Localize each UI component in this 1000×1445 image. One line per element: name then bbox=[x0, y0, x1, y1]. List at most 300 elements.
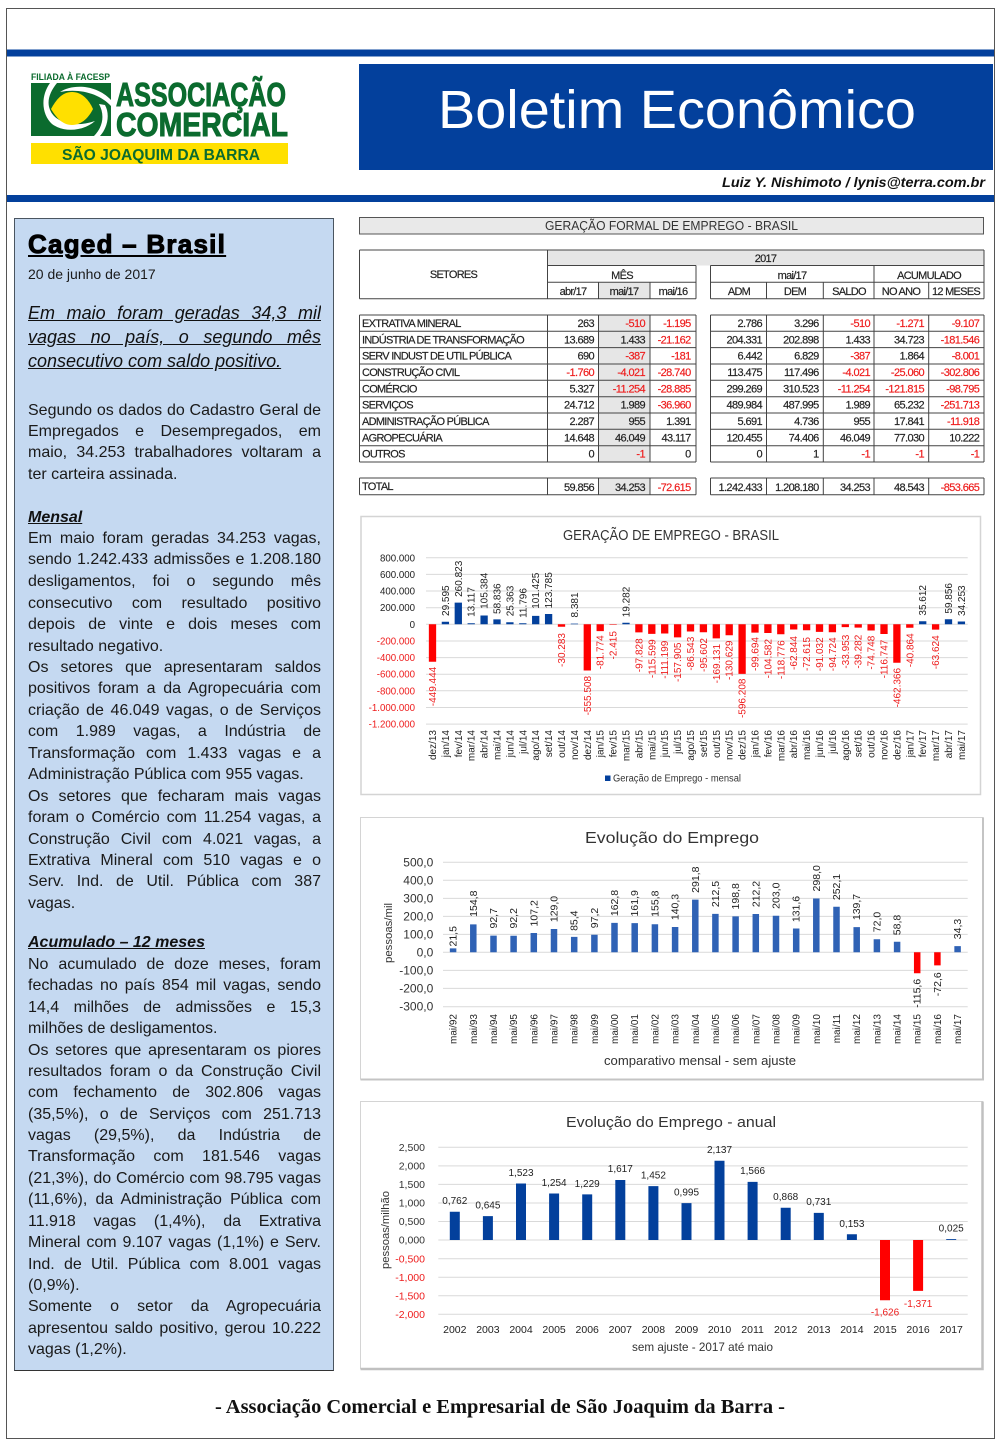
data labels: 155,8 bbox=[649, 890, 661, 917]
x axis labels: 2002 bbox=[443, 1324, 467, 1336]
section body: Acumulado: 11.918 vagas (1,4%), da Extrativa bbox=[28, 1213, 321, 1230]
table row: Administração Pública: -11.918 bbox=[947, 416, 980, 428]
y axis labels: -100,0 bbox=[399, 963, 434, 977]
x axis labels: mai/15 bbox=[913, 1014, 924, 1044]
lead text: vagas no país, o segundo mês bbox=[28, 327, 321, 347]
section body: Mensal: foram o Comércio com 11.254 vagas, a bbox=[28, 809, 321, 826]
x axis labels: ago/14 bbox=[531, 730, 542, 761]
table row: Administração Pública: 4.736 bbox=[794, 416, 819, 428]
x axis labels: 2011 bbox=[741, 1324, 764, 1336]
data labels: -111.199 bbox=[660, 640, 671, 679]
table header labels: MÊS bbox=[611, 269, 633, 282]
table row: Outros: 1 bbox=[813, 449, 819, 461]
y axis labels: -200.000 bbox=[377, 636, 416, 648]
section body: Acumulado: resultados foram o da Construção Civil bbox=[28, 1063, 321, 1080]
x axis labels: 2005 bbox=[542, 1324, 566, 1336]
data labels: -115,6 bbox=[912, 979, 924, 1008]
table row: Serv Indust de Util Pública: 690 bbox=[577, 351, 594, 363]
table row: Construção Civil: -1.760 bbox=[566, 367, 594, 379]
data labels: 34,3 bbox=[952, 919, 964, 939]
table row: Serv Indust de Util Pública: -181 bbox=[671, 351, 691, 363]
data labels: 129,0 bbox=[548, 896, 560, 922]
x axis labels: mai/92 bbox=[449, 1014, 460, 1044]
x axis labels: nov/16 bbox=[880, 730, 890, 760]
data labels bbox=[442, 1145, 964, 1318]
y axis labels bbox=[395, 1142, 425, 1321]
table row: Agropecuária: 46.049 bbox=[615, 432, 645, 444]
table header labels: DEM bbox=[784, 286, 807, 298]
table row: Agropecuária: 14.648 bbox=[564, 432, 594, 444]
table row: Serv Indust de Util Pública: -8.001 bbox=[952, 351, 980, 363]
table row: Serv Indust de Util Pública bbox=[362, 350, 980, 363]
x axis labels: abr/15 bbox=[634, 730, 645, 758]
data labels: 1,229 bbox=[575, 1179, 600, 1190]
x axis labels: mai/94 bbox=[489, 1014, 500, 1044]
table row: Agropecuária: AGROPECUÁRIA bbox=[362, 431, 443, 444]
table row: Serviços: 24.712 bbox=[564, 400, 594, 412]
table row: Construção Civil: CONSTRUÇÃO CIVIL bbox=[362, 366, 460, 379]
section body: Mensal: Os setores que apresentaram saldos bbox=[28, 659, 321, 676]
x axis labels: mai/02 bbox=[650, 1014, 661, 1044]
table row: Construção Civil: 117.496 bbox=[784, 367, 819, 379]
x axis labels: set/14 bbox=[544, 730, 555, 757]
lead text bbox=[28, 303, 321, 371]
x axis labels: fev/15 bbox=[609, 730, 620, 757]
x axis labels: mai/06 bbox=[731, 1014, 742, 1044]
y axis labels: 400,0 bbox=[403, 873, 434, 887]
table row: Comércio: 310.523 bbox=[783, 383, 819, 395]
x axis labels: mai/08 bbox=[772, 1014, 782, 1044]
table row: Construção Civil bbox=[362, 366, 980, 379]
table row: Extrativa Mineral: -510 bbox=[850, 318, 870, 330]
y axis labels: 1,500 bbox=[399, 1179, 425, 1191]
data labels: 2,137 bbox=[707, 1145, 732, 1156]
data labels: 131,6 bbox=[791, 896, 803, 922]
data labels: 203,0 bbox=[770, 882, 782, 909]
x axis labels: 2006 bbox=[576, 1324, 599, 1336]
intro paragraph: maio, 34.253 trabalhadores voltaram a bbox=[28, 444, 321, 461]
x axis labels: 2015 bbox=[873, 1324, 897, 1336]
data labels: 0,153 bbox=[839, 1219, 865, 1230]
table row: Agropecuária: 43.117 bbox=[661, 432, 691, 444]
table row: Serviços: 1.989 bbox=[845, 400, 870, 412]
section body: Mensal: consecutivo com resultado positivo bbox=[28, 595, 321, 612]
table header labels: ADM bbox=[728, 286, 751, 298]
section body: Mensal: positivos foram a da Agropecuária com bbox=[28, 680, 321, 697]
data labels: 0,995 bbox=[674, 1188, 699, 1198]
x axis labels: out/14 bbox=[557, 730, 568, 758]
y axis labels: -2,000 bbox=[395, 1309, 425, 1321]
x axis labels: fev/16 bbox=[763, 730, 774, 757]
x axis labels: mai/95 bbox=[509, 1014, 520, 1044]
table row: Extrativa Mineral: 263 bbox=[577, 318, 594, 330]
table header labels bbox=[430, 253, 980, 298]
section body: Acumulado: Transformação com 181.546 vagas bbox=[28, 1148, 321, 1165]
data labels: 1,523 bbox=[508, 1168, 534, 1179]
section body: Acumulado: vagas (1,2%). bbox=[28, 1341, 127, 1358]
footer: - Associação Comercial e Empresarial de São Joaquim da Barra - bbox=[215, 1396, 785, 1418]
x axis labels: mai/97 bbox=[550, 1014, 560, 1044]
data labels: 154,8 bbox=[468, 890, 480, 917]
table row: Total bbox=[362, 481, 980, 494]
x axis labels: dez/13 bbox=[428, 730, 439, 760]
section body: Acumulado: Mineral com 9.107 vagas (1,1%) e Serv. bbox=[28, 1234, 321, 1251]
table row: Construção Civil: 113.475 bbox=[727, 367, 762, 379]
x axis labels: nov/15 bbox=[725, 730, 736, 760]
table shading bbox=[548, 250, 984, 495]
data labels: 72,0 bbox=[871, 912, 883, 932]
employment table title bar: GERAÇÃO FORMAL DE EMPREGO - BRASIL bbox=[545, 219, 798, 233]
data labels: -95.602 bbox=[699, 638, 710, 672]
x axis labels: abr/17 bbox=[944, 730, 955, 758]
table row: Comércio: 299.269 bbox=[726, 383, 762, 395]
x axis labels: mar/15 bbox=[622, 730, 632, 761]
y axis labels: 100,0 bbox=[403, 927, 434, 941]
table row: Extrativa Mineral: -510 bbox=[625, 318, 645, 330]
table row: Indústria de Transformação: 34.723 bbox=[894, 334, 924, 346]
data labels: 59.856 bbox=[944, 583, 955, 614]
data labels: -91.032 bbox=[815, 637, 826, 671]
chart caption: sem ajuste - 2017 até maio bbox=[632, 1340, 773, 1354]
y axis labels: 500,0 bbox=[403, 855, 434, 869]
y axis labels: -300,0 bbox=[399, 1000, 434, 1014]
section body: Acumulado: milhões de desligamentos. bbox=[28, 1020, 217, 1037]
y axis labels: -1,000 bbox=[395, 1272, 425, 1284]
x axis labels: ago/15 bbox=[686, 730, 697, 761]
section body: Mensal: Transformação com 1.433 vagas e a bbox=[28, 745, 321, 762]
y axis labels bbox=[399, 855, 434, 1014]
data labels: 161,9 bbox=[629, 890, 641, 916]
x axis labels: jan/15 bbox=[596, 730, 607, 758]
y axis labels: 600.000 bbox=[380, 570, 416, 581]
x axis labels: jun/15 bbox=[660, 730, 671, 758]
x axis labels: jul/16 bbox=[828, 730, 839, 755]
x axis labels: 2016 bbox=[906, 1324, 930, 1336]
chart caption: comparativo mensal - sem ajuste bbox=[604, 1054, 796, 1068]
x axis labels bbox=[428, 730, 968, 761]
data labels: 260.823 bbox=[454, 560, 465, 597]
x axis labels: 2017 bbox=[940, 1324, 963, 1336]
data labels: 1,452 bbox=[641, 1170, 666, 1182]
section body: Acumulado bbox=[28, 956, 321, 1358]
data labels: 105.384 bbox=[480, 572, 491, 609]
data labels: -449.444 bbox=[428, 666, 439, 706]
y axis labels: 400.000 bbox=[380, 586, 416, 598]
data labels: -1,371 bbox=[904, 1299, 933, 1310]
table row: Serviços: 489.984 bbox=[726, 400, 762, 412]
y axis labels: -800.000 bbox=[377, 686, 416, 697]
section body: Mensal: criação de 46.049 vagas, o de Serviços bbox=[28, 702, 321, 719]
data labels: 0,645 bbox=[475, 1200, 501, 1212]
data labels: -62.844 bbox=[789, 636, 800, 670]
data labels: 58,8 bbox=[892, 915, 904, 935]
data labels: -39.282 bbox=[854, 634, 865, 669]
section body: Mensal: vagas. bbox=[28, 895, 75, 912]
table row: Serviços: 487.995 bbox=[783, 400, 819, 412]
table row: Serviços: -36.960 bbox=[658, 400, 691, 412]
section body: Acumulado: Ind. de Util. Pública com 8.001 vagas bbox=[28, 1256, 321, 1273]
table row: Construção Civil: -302.806 bbox=[941, 367, 980, 379]
table row: Outros: 0 bbox=[588, 449, 594, 461]
table row: Extrativa Mineral: -1.271 bbox=[896, 318, 924, 330]
y axis labels: -0,500 bbox=[395, 1253, 425, 1265]
table row: Total: TOTAL bbox=[362, 481, 393, 493]
x axis labels: mai/93 bbox=[469, 1014, 480, 1044]
logo: Associação Comercial: FILIADA À FACESP bbox=[31, 72, 111, 83]
section body: Acumulado: apresentou saldo positivo, gerou 10.222 bbox=[28, 1320, 321, 1337]
y axis title: pessoas/mil bbox=[383, 903, 395, 963]
y axis labels: -1.000.000 bbox=[369, 703, 416, 714]
y axis labels: -600.000 bbox=[377, 670, 416, 681]
x axis labels: mai/05 bbox=[711, 1014, 722, 1044]
table row: Outros: -1 bbox=[915, 449, 924, 461]
section: Mensal bbox=[28, 509, 321, 912]
x axis labels: mai/11 bbox=[832, 1014, 843, 1043]
logo: Associação Comercial: COMERCIAL bbox=[116, 106, 288, 143]
data labels bbox=[448, 865, 964, 1008]
table row: Comércio: -98.795 bbox=[946, 383, 980, 395]
y axis labels: 1,000 bbox=[399, 1198, 425, 1210]
intro paragraph: Empregados e Desempregados, em bbox=[28, 423, 321, 440]
table row: Extrativa Mineral: 3.296 bbox=[794, 318, 819, 330]
table row: Extrativa Mineral: -1.195 bbox=[663, 318, 691, 330]
data labels: -555.508 bbox=[583, 676, 594, 715]
x axis labels: mai/07 bbox=[751, 1014, 762, 1044]
table row: Construção Civil: -25.060 bbox=[891, 367, 924, 379]
positive bars bbox=[450, 1161, 956, 1240]
table row: Agropecuária: 120.455 bbox=[726, 432, 762, 444]
x axis labels: mai/00 bbox=[610, 1014, 621, 1044]
section body: Acumulado: (21,3%), do Comércio com 98.795 vagas bbox=[28, 1170, 321, 1187]
data labels: -116.747 bbox=[880, 639, 890, 678]
data labels: 162,8 bbox=[609, 890, 621, 916]
table header labels: ACUMULADO bbox=[897, 270, 962, 282]
table row: Serv Indust de Util Pública: 1.864 bbox=[899, 351, 924, 363]
table row: Administração Pública bbox=[362, 415, 980, 428]
table row: Total: 1.208.180 bbox=[775, 482, 819, 494]
x axis labels: mai/04 bbox=[691, 1014, 702, 1044]
table row: Outros: 0 bbox=[685, 449, 691, 461]
table row: Outros bbox=[362, 449, 980, 461]
data labels: 34.253 bbox=[957, 585, 968, 616]
data labels: -94.724 bbox=[828, 637, 839, 671]
section body: Acumulado: No acumulado de doze meses, foram bbox=[28, 956, 321, 973]
panel: Caged - Brasil background bbox=[14, 218, 334, 1371]
table row: Comércio: COMÉRCIO bbox=[362, 382, 418, 395]
data labels: -104.582 bbox=[763, 639, 774, 678]
table row: Serv Indust de Util Pública: -387 bbox=[850, 351, 870, 363]
legend: Geração de Emprego - mensal bbox=[613, 774, 741, 784]
table row: Outros: -1 bbox=[636, 449, 645, 461]
intro paragraph: Segundo os dados do Cadastro Geral de bbox=[28, 402, 321, 419]
y axis labels: 0,500 bbox=[399, 1216, 425, 1228]
y axis labels: 0,000 bbox=[399, 1235, 425, 1247]
table row: Outros: -1 bbox=[861, 449, 870, 461]
table row: Comércio: -11.254 bbox=[613, 383, 645, 395]
section body: Acumulado: (0,9%). bbox=[28, 1277, 80, 1294]
data labels: 11.796 bbox=[518, 588, 529, 618]
x axis labels: 2007 bbox=[609, 1324, 632, 1336]
data labels: 1,254 bbox=[542, 1178, 567, 1189]
x axis labels: mai/17 bbox=[957, 730, 968, 760]
section body: Mensal: Construção Civil com 4.021 vagas, a bbox=[28, 831, 321, 848]
x axis labels: 2004 bbox=[509, 1324, 533, 1336]
data labels: -596.208 bbox=[738, 678, 749, 718]
negative bars bbox=[880, 1240, 923, 1300]
table header labels: SALDO bbox=[832, 286, 867, 298]
table row: Indústria de Transformação: -21.162 bbox=[658, 334, 691, 346]
x axis labels: out/16 bbox=[867, 730, 878, 758]
lead text: Em maio foram geradas 34,3 mil bbox=[28, 303, 321, 323]
bottom header rule bbox=[7, 195, 994, 202]
data labels: -462.366 bbox=[892, 668, 903, 707]
section body: Mensal: Extrativa Mineral com 510 vagas e o bbox=[28, 852, 321, 869]
x axis labels bbox=[443, 1324, 963, 1336]
x axis labels: abr/16 bbox=[789, 730, 800, 758]
data labels: -97.828 bbox=[634, 638, 645, 672]
data labels: 101.425 bbox=[531, 572, 542, 609]
x axis labels: mai/10 bbox=[812, 1014, 823, 1044]
table row: Outros: OUTROS bbox=[362, 449, 405, 461]
section body: Acumulado: fechadas no país 854 mil vagas, sendo bbox=[28, 977, 321, 994]
table row: Total: -72.615 bbox=[658, 482, 691, 494]
data labels: -81.774 bbox=[596, 635, 607, 669]
data labels: -1,626 bbox=[871, 1308, 900, 1318]
data labels: 0,868 bbox=[773, 1192, 799, 1203]
title banner: Boletim Econômico bbox=[359, 64, 993, 170]
section body: Mensal: Em maio foram geradas 34.253 vagas, bbox=[28, 530, 321, 547]
table row: Total: 34.253 bbox=[615, 482, 645, 494]
data labels: -30.283 bbox=[557, 633, 568, 667]
table row: Outros: -1 bbox=[971, 449, 980, 461]
table row: Serv Indust de Util Pública: -387 bbox=[625, 351, 645, 363]
data labels: -157.905 bbox=[673, 642, 684, 682]
table row: Total: 59.856 bbox=[564, 482, 594, 494]
section: Acumulado - 12 meses bbox=[28, 934, 321, 1358]
data labels: 1,566 bbox=[740, 1166, 766, 1177]
data labels bbox=[428, 560, 968, 718]
table row: Comércio: -11.254 bbox=[838, 383, 870, 395]
data labels: 198,8 bbox=[730, 883, 742, 909]
x axis labels: mai/17 bbox=[953, 1014, 964, 1044]
table row: Extrativa Mineral: EXTRATIVA MINERAL bbox=[362, 318, 461, 330]
y axis labels: 200,0 bbox=[403, 909, 434, 923]
x axis labels: mar/17 bbox=[931, 730, 942, 761]
data labels: -74.748 bbox=[867, 635, 878, 670]
table row: Construção Civil: -4.021 bbox=[617, 367, 645, 379]
table row: Agropecuária: 46.049 bbox=[840, 432, 870, 444]
x axis labels: 2013 bbox=[807, 1324, 831, 1336]
data labels: -33.953 bbox=[841, 634, 852, 669]
table row: Serviços bbox=[362, 400, 980, 412]
table header labels: mai/17 bbox=[610, 286, 639, 298]
table row: Administração Pública: 955 bbox=[853, 416, 870, 428]
table row: Comércio: -121.815 bbox=[885, 383, 924, 395]
x axis labels: 2009 bbox=[675, 1324, 698, 1336]
data labels: 291,8 bbox=[690, 866, 702, 893]
table row: Extrativa Mineral: 2.786 bbox=[737, 318, 762, 330]
x axis labels: fev/14 bbox=[454, 730, 465, 757]
y axis labels: -1,500 bbox=[395, 1290, 425, 1302]
chart: Evolução do Emprego bbox=[360, 818, 983, 1080]
table row: Comércio: -28.885 bbox=[658, 383, 691, 395]
x axis labels: 2012 bbox=[774, 1324, 798, 1336]
positive bars bbox=[450, 898, 961, 952]
table row: Extrativa Mineral bbox=[362, 318, 980, 330]
x axis labels: mai/99 bbox=[590, 1014, 601, 1044]
table row: Serv Indust de Util Pública: SERV INDUST DE UTIL PÚBLICA bbox=[362, 350, 512, 363]
x axis labels: mai/12 bbox=[852, 1014, 863, 1044]
section heading: Acumulado: Acumulado – 12 meses bbox=[28, 934, 205, 951]
table row: Total: 1.242.433 bbox=[718, 482, 762, 494]
x axis labels: fev/17 bbox=[918, 730, 929, 757]
logo: Associação Comercial: SÃO JOAQUIM DA BARRA bbox=[62, 144, 260, 164]
data labels: 123.785 bbox=[544, 572, 555, 608]
table row: Administração Pública: 2.287 bbox=[569, 416, 594, 428]
chart: Geração de Emprego - Brasil bbox=[361, 516, 980, 794]
data labels: 212,2 bbox=[750, 881, 762, 907]
negative bars bbox=[429, 624, 939, 674]
data labels: 97,2 bbox=[589, 908, 601, 928]
data labels: 140,3 bbox=[670, 894, 682, 920]
data labels: 35.612 bbox=[918, 585, 929, 616]
section body: Mensal: com 1.989 vagas, a Indústria de bbox=[28, 723, 321, 740]
section body: Acumulado: Os setores que apresentaram os piores bbox=[28, 1042, 321, 1059]
x axis labels: mai/01 bbox=[630, 1014, 641, 1044]
negative bars bbox=[914, 952, 941, 973]
x axis labels: dez/14 bbox=[583, 730, 594, 760]
table row: Indústria de Transformação: 13.689 bbox=[564, 334, 594, 346]
x axis labels: mai/16 bbox=[802, 730, 813, 760]
table row: Serviços: 1.989 bbox=[620, 400, 645, 412]
data labels: -40.864 bbox=[905, 633, 916, 667]
table row: Agropecuária: 10.222 bbox=[949, 432, 980, 444]
x axis labels: mar/14 bbox=[467, 730, 478, 761]
x axis labels: mai/14 bbox=[492, 730, 504, 760]
x axis labels: jan/17 bbox=[905, 730, 916, 758]
table header labels: abr/17 bbox=[560, 286, 587, 298]
data labels: -169.131 bbox=[712, 644, 723, 683]
data labels: -115.599 bbox=[647, 639, 658, 678]
table row: Outros: 0 bbox=[756, 449, 762, 461]
x axis labels: jul/15 bbox=[673, 730, 684, 755]
x axis labels: mai/96 bbox=[529, 1014, 540, 1044]
data labels: 92,2 bbox=[508, 908, 520, 929]
table header labels: 2017 bbox=[755, 253, 777, 265]
section body: Mensal: sendo 1.242.433 admissões e 1.208.180 bbox=[28, 551, 321, 568]
data labels: 13.117 bbox=[467, 587, 478, 617]
data labels: -86.543 bbox=[686, 636, 697, 671]
data labels: -99.694 bbox=[750, 637, 762, 671]
x axis labels: jun/16 bbox=[815, 730, 826, 758]
data labels: 298,0 bbox=[811, 865, 823, 891]
title banner: Boletim Econômico: Boletim Econômico bbox=[438, 80, 916, 140]
table row: Agropecuária bbox=[362, 431, 980, 444]
table row: Construção Civil: -4.021 bbox=[842, 367, 870, 379]
x axis labels: mai/98 bbox=[570, 1014, 581, 1044]
section body: Mensal: Administração Pública com 955 vagas. bbox=[28, 766, 304, 783]
table row: Indústria de Transformação: 1.433 bbox=[620, 334, 645, 346]
chart: Evolução do Emprego - anual bbox=[360, 1102, 982, 1369]
table grid lines bbox=[360, 250, 984, 495]
x axis labels: jan/14 bbox=[441, 730, 452, 758]
positive bars bbox=[442, 603, 965, 624]
y axis title: pessoas/milhão bbox=[380, 1191, 392, 1269]
table row: Serviços: SERVIÇOS bbox=[362, 400, 413, 412]
data labels: 21,5 bbox=[448, 926, 460, 947]
data labels: -2.415 bbox=[609, 631, 620, 659]
data labels: 1,617 bbox=[608, 1164, 633, 1175]
